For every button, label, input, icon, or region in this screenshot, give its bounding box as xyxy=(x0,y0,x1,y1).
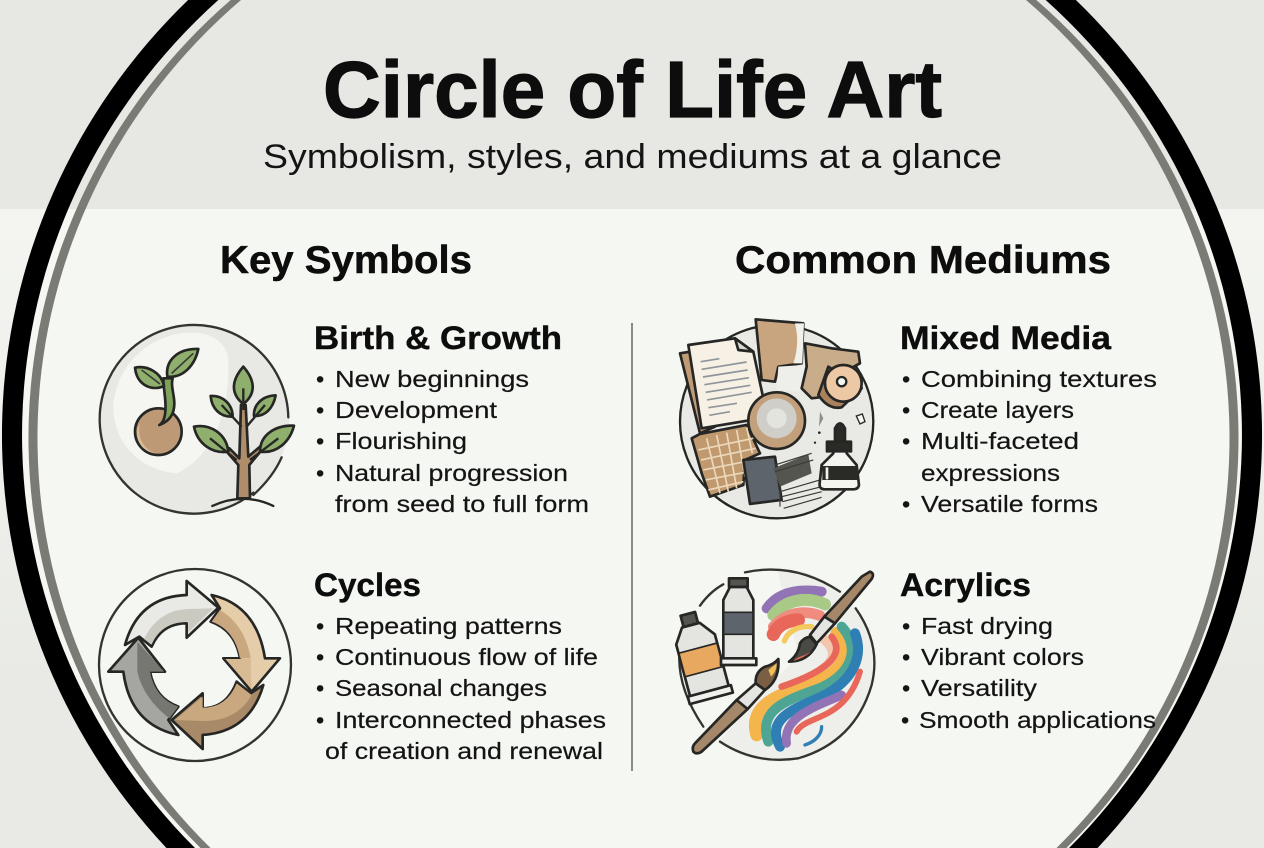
bullet list: Vibrant colors xyxy=(921,644,1084,670)
bullet list: • xyxy=(316,428,324,454)
heading: Cycles xyxy=(314,567,421,603)
bullet list: Fast drying xyxy=(921,613,1053,639)
bullet list: • xyxy=(902,366,910,392)
panel: cycles xyxy=(314,567,606,764)
bullet list: Interconnected phases xyxy=(335,707,606,733)
bullet list: Repeating patterns xyxy=(335,613,562,639)
paint tube: grey xyxy=(721,578,756,665)
bullet list: • xyxy=(316,644,324,670)
icon: seed and sapling xyxy=(100,324,294,514)
title: Circle of Life Art xyxy=(323,45,942,134)
paper sheets xyxy=(680,352,715,433)
heading: Birth & Growth xyxy=(314,320,562,356)
plaid fabric xyxy=(692,425,760,497)
icon: cycle arrows xyxy=(99,569,291,761)
column divider xyxy=(631,323,633,771)
heading: Acrylics xyxy=(900,567,1031,603)
dark fabric xyxy=(743,457,782,504)
bullet list xyxy=(902,366,1157,517)
bullet list: • xyxy=(902,675,910,701)
seed xyxy=(135,408,182,455)
brush: upper right xyxy=(789,572,873,662)
arrow: left xyxy=(108,638,178,735)
bullet list: Development xyxy=(335,397,498,423)
bullet list: Seasonal changes xyxy=(335,675,547,701)
rainbow swirl xyxy=(755,627,860,747)
bullet list: • xyxy=(316,707,324,733)
bullet list: • xyxy=(901,707,909,733)
bullet list: expressions xyxy=(921,460,1060,486)
bullet list: Continuous flow of life xyxy=(335,644,598,670)
arrow: right xyxy=(211,595,280,692)
bullet list: Smooth applications xyxy=(919,707,1156,733)
bowl xyxy=(748,392,805,449)
bullet list: • xyxy=(316,460,324,486)
bullet list xyxy=(316,613,606,764)
torn tan paper xyxy=(756,319,803,382)
bullet list: Natural progression xyxy=(335,460,568,486)
bullet list: Versatility xyxy=(921,675,1037,701)
icon: acrylic paints and brushes xyxy=(667,568,874,762)
sprout xyxy=(159,378,174,425)
arrow: top xyxy=(125,581,218,647)
bullet list: • xyxy=(902,491,910,517)
bullet list: • xyxy=(902,428,910,454)
subtitle: Symbolism, styles, and mediums at a glance xyxy=(263,138,1002,176)
bullet list: Create layers xyxy=(921,397,1074,423)
bullet list: • xyxy=(316,397,324,423)
brush: lower left xyxy=(693,659,778,753)
panel: mixed media xyxy=(900,320,1157,517)
heading: Mixed Media xyxy=(900,320,1111,356)
bullet list xyxy=(901,613,1156,733)
heading: key symbols: Key Symbols xyxy=(220,239,472,282)
arrow: bottom xyxy=(172,682,263,749)
bullet list: • xyxy=(902,644,910,670)
bullet list xyxy=(316,366,589,517)
upper colour swash xyxy=(767,591,825,641)
paint tube: orange xyxy=(667,608,733,704)
spool xyxy=(818,365,862,408)
bullet list: Multi-faceted xyxy=(921,428,1079,454)
bullet list: • xyxy=(316,366,324,392)
ink bottle xyxy=(820,423,859,489)
bullet list: from seed to full form xyxy=(335,491,589,517)
sapling xyxy=(227,405,262,498)
hatching xyxy=(773,453,822,508)
panel: birth and growth xyxy=(314,320,589,517)
bullet list: • xyxy=(902,613,910,639)
bullet list: Versatile forms xyxy=(921,491,1098,517)
bullet list: • xyxy=(316,613,324,639)
icon: mixed media collage xyxy=(680,319,873,518)
heading: common mediums: Common Mediums xyxy=(735,239,1111,282)
bullet list: New beginnings xyxy=(335,366,529,392)
bullet list: Combining textures xyxy=(921,366,1157,392)
bullet list: of creation and renewal xyxy=(325,738,603,764)
bullet list: • xyxy=(316,675,324,701)
bullet list: • xyxy=(902,397,910,423)
panel: acrylics xyxy=(900,567,1156,733)
bullet list: Flourishing xyxy=(335,428,467,454)
